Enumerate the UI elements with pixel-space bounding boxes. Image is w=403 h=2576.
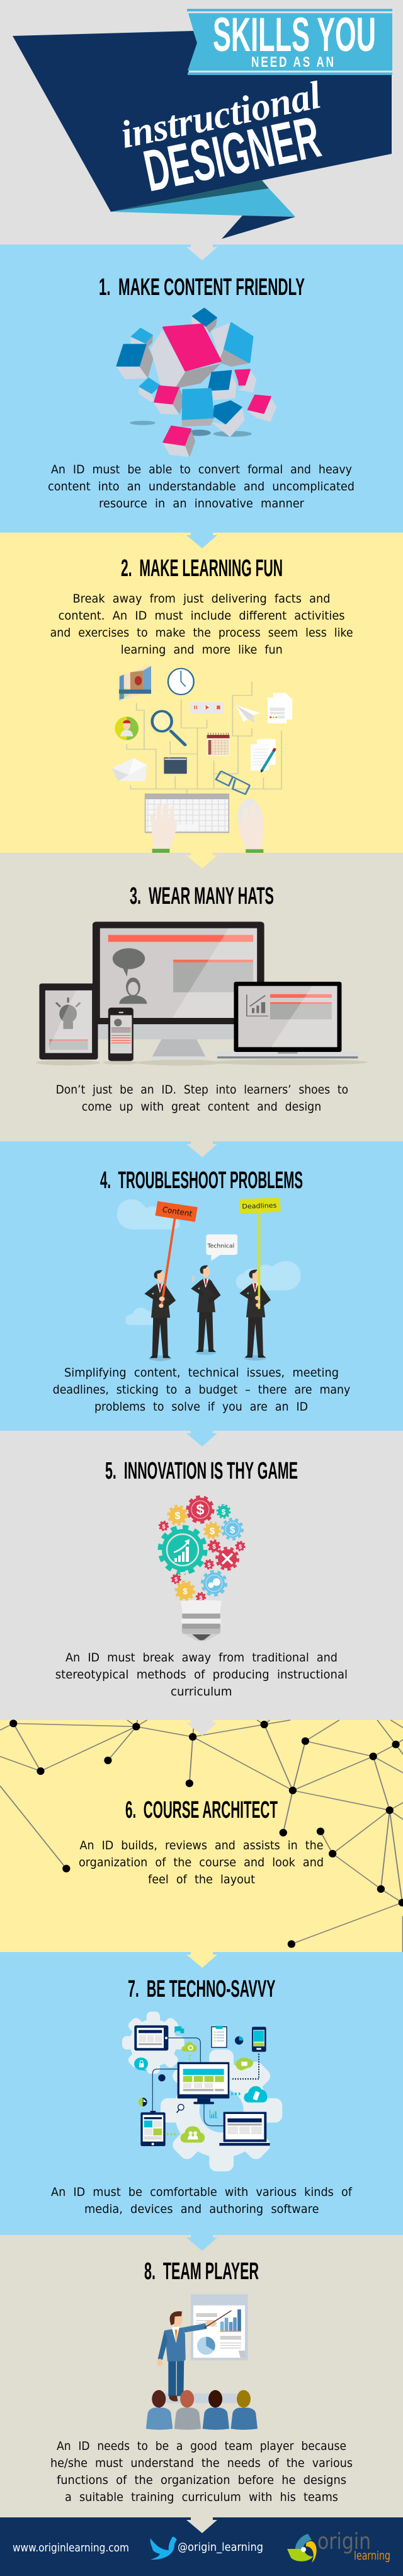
icon: dark dial — [158, 2074, 166, 2081]
icon: clipboard — [212, 2026, 227, 2047]
logo: origin learning — [287, 2529, 390, 2563]
heading: 8. TEAM PLAYER — [144, 2258, 259, 2285]
arrow — [186, 1952, 217, 1968]
gear: red tiny bottom left — [172, 1574, 181, 1583]
man speaking with bubble: Technical — [207, 1243, 234, 1249]
panel: 4 troubleshoot problems — [0, 1141, 403, 1431]
heading: 7. BE TECHNO-SAVVY — [128, 1976, 276, 2002]
icon: paper plane — [236, 705, 261, 723]
right hand — [239, 804, 263, 850]
gear: red small centre: $ — [212, 1544, 216, 1551]
gear: blue dollar — [222, 1519, 242, 1539]
laptop — [219, 2112, 270, 2146]
gear: red tiny lower: $ — [207, 1562, 211, 1568]
icon: notepad and pencil — [251, 739, 276, 773]
gear: yellow middle: $ — [210, 1526, 215, 1537]
gear: red tiny bottom — [196, 1593, 205, 1602]
body text: come up with great content and design — [82, 1100, 321, 1114]
arrow — [186, 853, 217, 869]
gear: yellow dollar: $ — [175, 1511, 181, 1522]
laptop — [215, 982, 360, 1058]
panel: 8 team player — [0, 2235, 403, 2517]
icon: mail bubble — [236, 2058, 253, 2071]
body text: content. An ID must include different activities — [59, 609, 345, 623]
icon: chat bubbles — [174, 2026, 184, 2033]
title: instructional script: instructional — [117, 74, 325, 157]
body text: problems to solve if you are an ID — [94, 1400, 308, 1414]
body text: organization of the course and look and — [79, 1856, 324, 1869]
icon: pie chart — [235, 2036, 243, 2045]
audience member 1 — [146, 2390, 173, 2430]
body text — [55, 1651, 348, 1699]
icon: media controls — [190, 702, 224, 713]
illustration: presenter and team — [146, 2294, 258, 2430]
icon: calendar — [207, 733, 229, 756]
body text: An ID must be able to convert formal and heavy — [51, 463, 352, 477]
body text: a suitable training curriculum with his teams — [65, 2490, 338, 2504]
gear: red wrench — [217, 1548, 238, 1569]
twitter handle: @origin_learning — [178, 2541, 263, 2554]
body text: stereotypical methods of producing instructional — [55, 1668, 348, 1682]
body text: learning and more like fun — [121, 643, 283, 657]
gear: yellow middle — [205, 1523, 220, 1538]
body text — [51, 2185, 353, 2216]
background gears — [122, 2012, 282, 2171]
illustration: learning tools circuit — [112, 665, 292, 853]
tablet landscape — [134, 2025, 168, 2050]
gear: teal small: $ — [222, 1508, 226, 1516]
arrow — [186, 533, 217, 548]
panel: 5 innovation is thy game — [0, 1431, 403, 1720]
illustration: responsive devices — [36, 921, 368, 1066]
gear: large red dollar: $ — [196, 1501, 205, 1518]
desktop monitor — [93, 921, 264, 1060]
device shadows — [36, 1060, 368, 1066]
body text: Don’t just be an ID. Step into learners’ shoes to — [56, 1083, 348, 1097]
gear: red tiny left: $ — [162, 1523, 166, 1530]
tablet — [39, 983, 98, 1060]
audience member 4 — [231, 2390, 258, 2430]
body text: An ID must break away from traditional and — [65, 1651, 338, 1665]
panel: title header — [0, 0, 403, 245]
website: www.originlearning.com — [13, 2541, 129, 2555]
arrow — [186, 2517, 217, 2533]
icon: documents — [268, 693, 292, 724]
man with content sign — [144, 1201, 198, 1361]
body text: he/she must understand the needs of the various — [50, 2456, 353, 2470]
icon: clock — [168, 669, 194, 695]
gear: red tiny bottom left: $ — [174, 1576, 178, 1583]
logo mark — [287, 2534, 317, 2563]
circuit lines — [127, 681, 281, 794]
illustration: lightbulb of gears — [159, 1497, 245, 1641]
body text: and exercises to make the process seem less like — [50, 626, 353, 640]
desktop monitor — [178, 2062, 229, 2104]
body text: content into an understandable and uncomplicated — [48, 480, 355, 494]
body text: deadlines, sticking to a budget – there are many — [53, 1383, 350, 1397]
logo word: learning: learning — [354, 2549, 390, 2563]
icon: envelope — [112, 758, 147, 781]
dotted link — [231, 2053, 259, 2079]
arrow — [186, 1720, 217, 1736]
body text: An ID builds, reviews and assists in the — [79, 1839, 324, 1852]
gear: blue people — [202, 1571, 226, 1595]
body text — [48, 463, 355, 511]
body text: An ID needs to be a good team player because — [57, 2439, 346, 2453]
icon: green gear cloud — [181, 2042, 197, 2060]
connectors — [152, 2038, 224, 2126]
panel: 2 make learning fun — [0, 533, 403, 853]
presentation board — [191, 2294, 247, 2360]
panel: 3 wear many hats — [0, 853, 403, 1141]
smartphone — [252, 2027, 266, 2052]
panel: 7 be techno-savvy — [0, 1952, 403, 2235]
body text: An ID must be comfortable with various kinds of — [51, 2185, 353, 2199]
icon: green pie — [139, 2098, 147, 2106]
body text — [53, 1366, 350, 1414]
icon: twitter bird — [150, 2537, 177, 2560]
heading: 3. WEAR MANY HATS — [130, 883, 274, 910]
icon: avatar — [115, 717, 139, 740]
icon: glasses — [216, 771, 250, 794]
body text: functions of the organization before he designs — [57, 2473, 346, 2487]
gear: red tiny lower — [205, 1560, 213, 1569]
gear: yellow bottom — [176, 1582, 194, 1600]
ribbon: navy folded banner — [13, 31, 392, 239]
bulb base — [181, 1600, 222, 1641]
icon: lock bubble — [134, 2057, 148, 2071]
logo word: origin: origin — [317, 2529, 371, 2555]
audience member 3 — [203, 2390, 229, 2430]
floor platform — [164, 2393, 237, 2403]
gear: large teal growth — [161, 1528, 205, 1572]
illustration: floating cubes — [116, 308, 276, 457]
presenter — [157, 2311, 231, 2401]
panel: 1 make content friendly — [0, 245, 403, 533]
left hand — [150, 803, 177, 850]
body text: curriculum — [171, 1685, 232, 1699]
body text: Simplifying content, technical issues, meeting — [64, 1366, 339, 1380]
arrow — [186, 1431, 217, 1447]
man with content sign: Content — [161, 1205, 193, 1218]
panel: footer — [0, 2517, 403, 2576]
illustration: connected devices on gears — [122, 2012, 282, 2171]
arrow — [186, 245, 217, 260]
icon: magnifier — [152, 711, 185, 745]
subtitle: need as an: NEED AS AN — [251, 54, 336, 70]
arrows: green — [167, 2132, 176, 2136]
tablet portrait — [140, 2111, 166, 2146]
icon: magnifier — [177, 2105, 184, 2113]
gear: blue dollar: $ — [230, 1525, 236, 1535]
body text: resource in an innovative manner — [99, 497, 304, 511]
phone — [108, 1008, 133, 1061]
gear: teal small — [217, 1505, 230, 1518]
panel: 6 course architect — [0, 1719, 403, 1952]
illustration: three businessmen with signs — [117, 1198, 301, 1361]
body text: feel of the layout — [148, 1873, 255, 1886]
left cuff — [152, 849, 169, 853]
arrows: teal — [231, 2092, 241, 2096]
arrow — [186, 2235, 217, 2251]
icon: map — [119, 665, 151, 702]
gear: red small right: $ — [239, 1544, 242, 1550]
body text: media, devices and authoring software — [84, 2202, 319, 2216]
gear: red tiny bottom: $ — [199, 1595, 203, 1601]
arrow — [186, 1141, 217, 1157]
body text — [50, 592, 353, 657]
keyboard — [145, 794, 229, 833]
gear: red tiny left — [159, 1522, 168, 1530]
body text — [56, 1083, 348, 1114]
icon: browser window — [164, 757, 187, 774]
mouse — [238, 799, 261, 831]
icon: teal cloud with phone — [244, 2086, 267, 2103]
icon: green people cloud — [180, 2126, 205, 2142]
right cuff — [246, 849, 263, 853]
man with deadlines sign — [239, 1198, 281, 1361]
ribbon: light blue title band — [187, 9, 392, 75]
gear: large red dollar — [188, 1497, 213, 1522]
icon: bar chart — [210, 2110, 218, 2118]
gear: red small centre — [208, 1540, 220, 1552]
network background — [0, 1719, 403, 1952]
body text — [79, 1839, 324, 1886]
gear: yellow dollar — [169, 1506, 186, 1524]
audience member 2 — [174, 2390, 201, 2430]
man speaking with bubble — [191, 1234, 237, 1355]
gear: yellow bottom: $ — [183, 1586, 188, 1596]
body text: Break away from just delivering facts and — [73, 592, 330, 606]
body text — [50, 2439, 353, 2504]
gear: red small right — [236, 1542, 245, 1551]
clouds — [117, 1199, 301, 1325]
heading: 6. COURSE ARCHITECT — [125, 1797, 278, 1823]
man with deadlines sign: Deadlines — [242, 1201, 277, 1210]
